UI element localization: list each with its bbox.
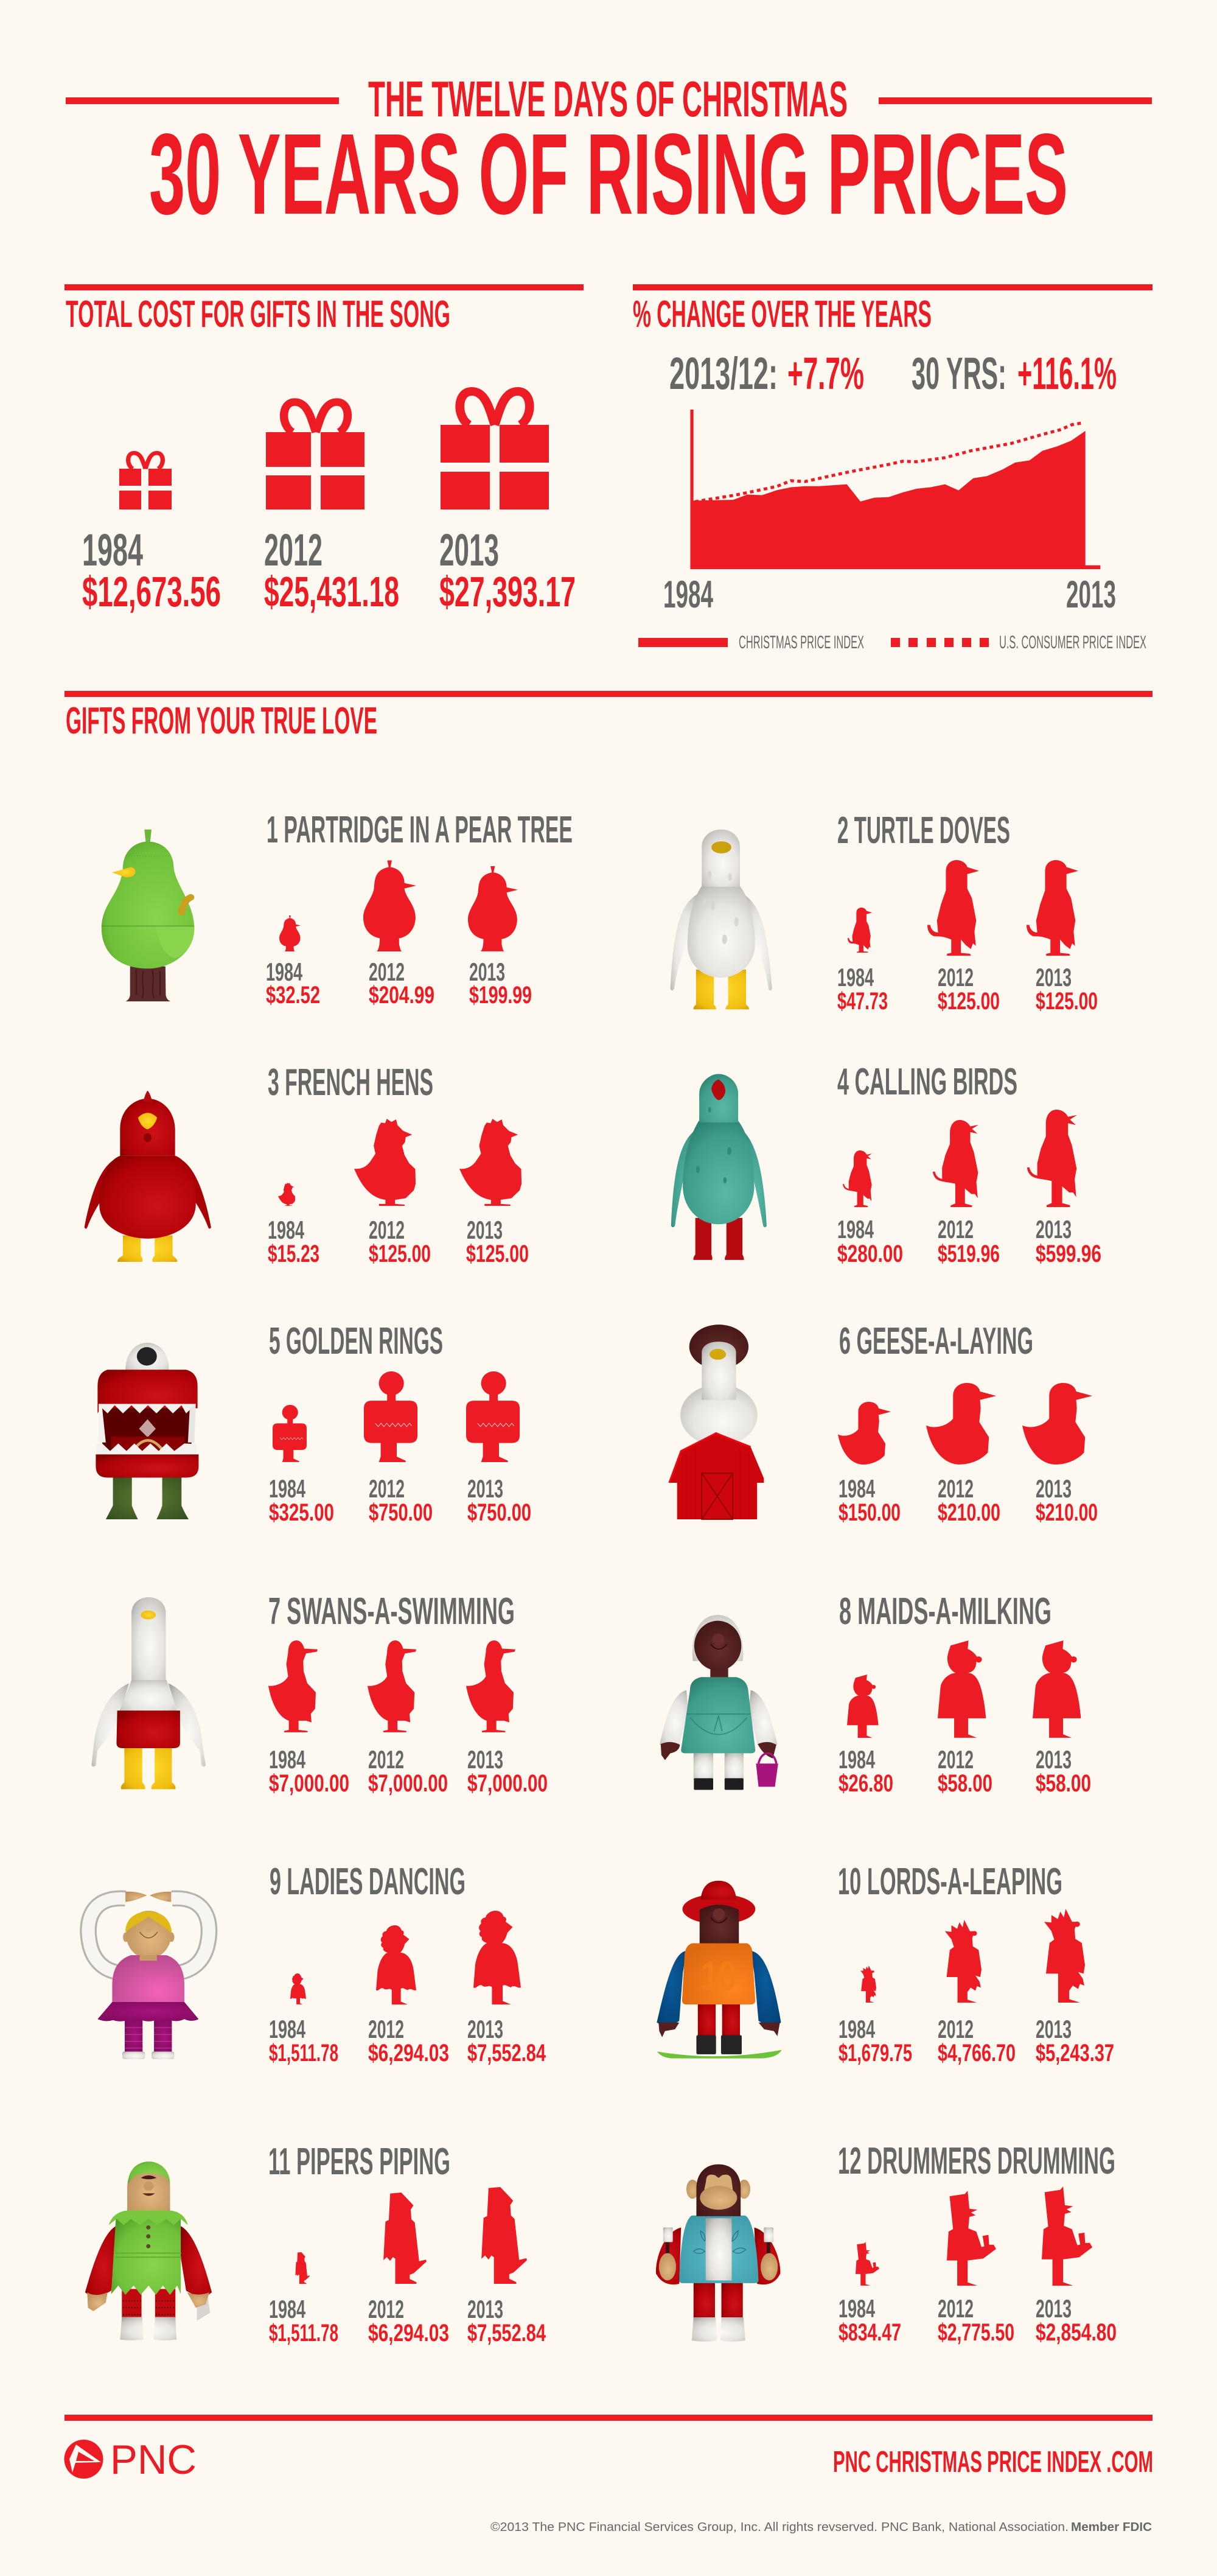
panel: percent change	[633, 284, 1152, 653]
year labels: 2012	[938, 1474, 974, 1503]
silhouette 1984	[279, 915, 301, 951]
year labels	[269, 1745, 503, 1774]
copyright: ©2013 The PNC Financial Services Group, Inc. All rights revserved. PNC Bank, National Association.	[490, 2521, 1069, 2534]
stat: 30 yrs: 30 YRS:	[912, 348, 1006, 399]
prices	[837, 988, 1098, 1015]
panel: 12 drummers	[656, 2140, 1117, 2346]
year labels: 2013	[1036, 1474, 1072, 1503]
year labels: 2012	[938, 2015, 974, 2043]
year labels: 2013	[467, 2295, 503, 2323]
year labels	[839, 2015, 1072, 2043]
silhouette 1984	[273, 1405, 307, 1462]
year labels: 1984	[268, 1216, 304, 1244]
icon: gift 2012	[266, 402, 364, 509]
prices: $2,775.50	[938, 2319, 1014, 2346]
panel: 8 maids	[660, 1591, 1091, 1797]
year labels	[269, 2295, 503, 2323]
prices: $2,854.80	[1036, 2319, 1117, 2346]
silhouette 2012	[364, 1371, 417, 1462]
year labels: 2013	[467, 1216, 503, 1244]
legend	[638, 632, 1146, 653]
silhouette 1984	[268, 1640, 318, 1732]
silhouette 1984	[843, 1150, 872, 1207]
prices: $204.99	[369, 982, 434, 1009]
year labels: 1984	[266, 957, 302, 986]
year labels	[268, 1216, 503, 1244]
heading: 2 TURTLE DOVES	[837, 810, 1010, 852]
prices: $125.00	[938, 988, 1000, 1015]
year 2012: 2012	[264, 525, 323, 575]
heading: total cost: TOTAL COST FOR GIFTS IN THE SONG	[66, 293, 450, 335]
year labels: 2012	[938, 2294, 974, 2323]
character: lord: 10	[700, 1953, 736, 1999]
year labels: 2013	[1036, 2294, 1072, 2323]
prices: $4,766.70	[938, 2040, 1016, 2067]
panel: 6 geese	[669, 1320, 1098, 1526]
character: piper	[85, 2161, 212, 2340]
silhouette 2013	[481, 2187, 527, 2284]
year labels: 2012	[938, 963, 974, 992]
year 1984: 1984	[82, 525, 143, 575]
prices	[839, 1499, 1098, 1526]
character: dove	[671, 830, 772, 1009]
year labels: 2012	[369, 957, 405, 986]
prices: $15.23	[268, 1241, 319, 1267]
prices: $5,243.37	[1036, 2040, 1114, 2067]
stat: 2013/12: +7.7%	[787, 348, 864, 399]
year labels: 2013	[469, 957, 505, 986]
silhouette 2012	[368, 1640, 416, 1732]
year labels: 1984	[269, 1745, 305, 1774]
prices	[269, 2320, 546, 2347]
icon: gift 2013	[441, 391, 549, 509]
year labels	[839, 1745, 1072, 1774]
silhouette 2013	[1022, 1383, 1092, 1465]
panel: 10 lords	[657, 1861, 1114, 2067]
prices	[266, 982, 532, 1009]
year labels	[269, 1474, 503, 1503]
prices: $7,552.84	[467, 2320, 546, 2347]
silhouette 2012	[945, 1920, 982, 2003]
prices: $599.96	[1036, 1241, 1101, 1267]
silhouette 2012	[927, 860, 979, 956]
year labels: 2012	[368, 1745, 404, 1774]
year labels	[839, 1474, 1072, 1503]
title: the twelve days: THE TWELVE DAYS OF CHRISTMAS	[368, 71, 848, 127]
year labels: 2012	[938, 1215, 974, 1244]
silhouette 1984	[278, 1183, 295, 1206]
heading: 5 GOLDEN RINGS	[269, 1320, 443, 1362]
prices: $199.99	[469, 982, 532, 1009]
year labels: 1984	[839, 1474, 875, 1503]
prices	[269, 2040, 546, 2067]
year labels: 1984	[839, 2294, 875, 2323]
prices: $7,000.00	[368, 1770, 448, 1797]
silhouette 2012	[933, 1120, 978, 1207]
prices: $7,000.00	[467, 1770, 548, 1797]
silhouette 2013	[468, 866, 518, 951]
silhouette 2013	[1033, 1640, 1081, 1738]
character: goose on barn	[669, 1325, 764, 1519]
silhouette 1984	[860, 1965, 876, 2003]
silhouette 1984	[838, 1402, 891, 1465]
silhouette 1984	[290, 1973, 306, 2004]
area chart	[690, 410, 1100, 569]
character: dancer	[88, 1892, 209, 2059]
silhouette 2012	[938, 1640, 986, 1738]
silhouette 1984	[856, 2242, 879, 2286]
year labels: 2013	[467, 1745, 503, 1774]
year labels: 1984	[839, 2015, 875, 2043]
prices: $210.00	[1036, 1499, 1098, 1526]
panel: 4 calling birds	[671, 1061, 1101, 1267]
character: pear partridge	[102, 830, 194, 1001]
year labels	[839, 2294, 1072, 2323]
logo: PNC	[65, 2437, 197, 2483]
prices: $26.80	[839, 1770, 893, 1797]
prices: $1,679.75	[839, 2040, 912, 2067]
prices: $6,294.03	[368, 2320, 449, 2347]
prices: $6,294.03	[368, 2040, 449, 2067]
year labels: 2013	[467, 1474, 503, 1503]
prices: $1,511.78	[269, 2040, 338, 2067]
axis label 2013: 2013	[1066, 573, 1116, 616]
prices: $7,552.84	[467, 2040, 546, 2067]
character: maid	[660, 1615, 778, 1790]
silhouette 2012	[926, 1383, 996, 1465]
icon: gift 1984	[119, 453, 172, 509]
silhouette 1984	[848, 908, 872, 953]
year labels: 1984	[837, 963, 874, 992]
year labels: 2012	[368, 2015, 404, 2043]
year labels: 2013	[1036, 2015, 1072, 2043]
year labels	[269, 2015, 503, 2043]
prices: $1,511.78	[269, 2320, 338, 2347]
prices	[268, 1241, 529, 1267]
character: drummer monkey	[656, 2165, 780, 2342]
year labels	[266, 957, 505, 986]
panel: 1 partridge	[102, 809, 573, 1009]
prices: $519.96	[938, 1241, 1000, 1267]
prices: $125.00	[369, 1241, 431, 1267]
prices: $150.00	[839, 1499, 901, 1526]
prices: $32.52	[266, 982, 320, 1009]
year labels: 1984	[269, 2015, 305, 2043]
section: gifts heading	[65, 691, 1152, 742]
prices	[269, 1770, 548, 1797]
prices	[839, 2040, 1114, 2067]
heading: 7 SWANS-A-SWIMMING	[268, 1591, 515, 1633]
heading: 9 LADIES DANCING	[270, 1861, 466, 1903]
heading: 4 CALLING BIRDS	[837, 1061, 1017, 1103]
prices: $210.00	[938, 1499, 1000, 1526]
year labels	[837, 963, 1072, 992]
prices: $280.00	[837, 1241, 903, 1267]
year labels: 2013	[1036, 1745, 1072, 1774]
silhouette 2013	[466, 1371, 520, 1462]
prices	[269, 1499, 531, 1526]
prices	[839, 1770, 1091, 1797]
year labels: 1984	[269, 2295, 305, 2323]
silhouette 2012	[383, 2193, 427, 2284]
character: swan	[91, 1597, 206, 1789]
year labels: 1984	[269, 1474, 305, 1503]
price 1984: $12,673.56	[82, 568, 221, 615]
heading: percent change: % CHANGE OVER THE YEARS	[633, 293, 932, 335]
year labels: 2012	[369, 1474, 405, 1503]
panel: 7 swans	[91, 1591, 548, 1797]
year labels: 2012	[938, 1745, 974, 1774]
character: hen	[85, 1091, 211, 1262]
heading: 3 FRENCH HENS	[268, 1062, 433, 1104]
logo: PNC: PNC	[110, 2437, 197, 2483]
heading: 1 PARTRIDGE IN A PEAR TREE	[267, 809, 573, 851]
prices	[837, 1241, 1101, 1267]
panel: 9 ladies	[88, 1861, 546, 2067]
year labels: 2013	[1036, 1215, 1072, 1244]
silhouette 2013	[1044, 1909, 1085, 2003]
silhouette 2012	[354, 1119, 416, 1206]
year labels: 1984	[837, 1215, 874, 1244]
panel: 11 pipers	[85, 2141, 546, 2347]
price 2012: $25,431.18	[264, 568, 399, 615]
footer	[65, 2415, 1153, 2534]
silhouette 2013	[1027, 860, 1078, 956]
panel: 5 golden rings	[96, 1320, 531, 1526]
year 2013: 2013	[439, 525, 499, 575]
heading: gifts from your true love: GIFTS FROM YOUR TRUE LOVE	[66, 700, 377, 742]
year labels: 1984	[839, 1745, 875, 1774]
panel: 2 turtle doves	[671, 810, 1098, 1015]
silhouette 2013	[1042, 2186, 1092, 2286]
silhouette 1984	[295, 2252, 310, 2284]
year labels	[837, 1215, 1072, 1244]
stat: 2013/12: 2013/12:	[669, 348, 778, 399]
silhouette 2013	[459, 1119, 521, 1206]
character: calling bird	[671, 1074, 767, 1260]
prices: $325.00	[269, 1499, 334, 1526]
panel: 3 french hens	[85, 1062, 529, 1267]
character: lord	[657, 1881, 782, 2059]
prices: $47.73	[837, 988, 888, 1015]
stat: 30 yrs: +116.1%	[1017, 348, 1117, 399]
year labels: 2012	[368, 2295, 404, 2323]
year labels: 2012	[369, 1216, 405, 1244]
axis label 1984: 1984	[663, 573, 713, 616]
prices: $125.00	[1036, 988, 1098, 1015]
silhouette 2012	[363, 861, 416, 951]
silhouette 2012	[947, 2191, 996, 2286]
year labels: 2013	[1036, 963, 1072, 992]
prices: $750.00	[369, 1499, 433, 1526]
prices: $125.00	[466, 1241, 529, 1267]
heading: 11 PIPERS PIPING	[268, 2141, 450, 2183]
member fdic: Member FDIC	[1071, 2521, 1152, 2534]
price 2013: $27,393.17	[439, 568, 576, 615]
silhouette 1984	[847, 1675, 879, 1738]
character: ring box monster	[96, 1343, 198, 1519]
legend: CHRISTMAS PRICE INDEX	[739, 632, 864, 653]
silhouette 2013	[1027, 1110, 1077, 1207]
prices: $750.00	[467, 1499, 531, 1526]
silhouette 2013	[466, 1640, 515, 1732]
prices: $7,000.00	[269, 1770, 349, 1797]
heading: 8 MAIDS-A-MILKING	[839, 1591, 1051, 1633]
header	[66, 71, 1152, 239]
panel: total cost for gifts	[65, 284, 584, 615]
prices	[839, 2319, 1117, 2346]
year labels: 2013	[467, 2015, 503, 2043]
silhouette 2013	[473, 1911, 521, 2004]
silhouette 2012	[376, 1925, 416, 2004]
prices: $58.00	[938, 1770, 992, 1797]
prices: $58.00	[1036, 1770, 1091, 1797]
heading: 6 GEESE-A-LAYING	[839, 1320, 1033, 1362]
prices: $834.47	[839, 2319, 901, 2346]
